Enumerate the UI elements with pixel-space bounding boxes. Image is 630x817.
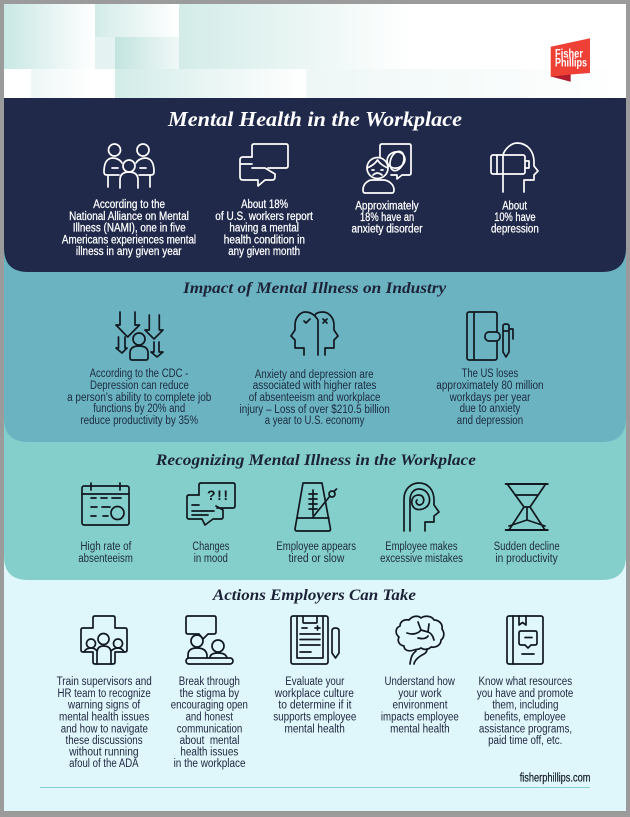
icon: family group — [104, 144, 154, 188]
text blocks: statistics: of U.S. workers report — [215, 211, 314, 223]
text blocks: actions: Understand how — [384, 676, 455, 688]
icon: speech bubbles with punctuation: ?!! — [207, 487, 228, 503]
text blocks: statistics: illness in any given year — [76, 246, 182, 258]
icon: notebook and pen — [467, 312, 513, 360]
text blocks: actions: afoul of the ADA — [69, 758, 139, 770]
text blocks: actions: mental health — [284, 724, 345, 736]
text blocks: recognizing: Employee makes — [385, 541, 458, 553]
header banner with teal blocks — [4, 4, 626, 98]
icon: calendar — [82, 483, 129, 525]
icon: anxious woman with scribble thought — [363, 144, 411, 193]
icon: two opposing heads — [291, 312, 338, 355]
text blocks: impact: The US loses — [462, 368, 518, 380]
text blocks: actions: without running — [68, 746, 139, 758]
text blocks: statistics: About — [502, 200, 528, 212]
text blocks: statistics: health condition in — [224, 234, 305, 246]
text blocks: actions: assistance programs, — [479, 724, 572, 736]
text blocks: impact: a year to U.S. economy — [265, 415, 365, 427]
text blocks: actions: environment — [392, 700, 448, 712]
text blocks: impact: functions by 20% and — [93, 403, 185, 415]
text blocks: impact: approximately 80 million — [436, 380, 544, 392]
text blocks: recognizing — [78, 541, 560, 565]
text blocks: actions: Break through — [179, 676, 240, 688]
text blocks: impact: a person's ability to complete job — [67, 392, 211, 404]
text blocks: recognizing: tired or slow — [288, 553, 345, 565]
text blocks: actions: encouraging open — [171, 700, 248, 712]
text blocks: actions: impacts employee — [381, 712, 459, 724]
text blocks: actions: Train supervisors and — [57, 676, 152, 688]
icon: speech bubbles with punctuation — [187, 483, 235, 525]
text blocks: impact: of absenteeism and workplace — [249, 392, 380, 404]
text blocks: statistics: any given month — [228, 246, 300, 258]
text blocks: recognizing: Sudden decline — [494, 541, 560, 553]
text blocks: actions: about mental — [180, 735, 240, 747]
text blocks: actions: benefits, employee — [484, 712, 566, 724]
text blocks: recognizing: Employee appears — [276, 541, 356, 553]
heading: impact: Impact of Mental Illness on Industry — [182, 280, 447, 297]
icon: team in medical cross — [81, 616, 127, 664]
text blocks: statistics: 10% have — [494, 212, 536, 224]
text blocks: statistics: 18% have an — [360, 212, 414, 224]
logo: Fisher Phillips flag: Phillips — [555, 58, 587, 70]
text blocks: actions: and how to navigate — [61, 724, 148, 736]
text blocks: impact: and depression — [457, 415, 523, 427]
text blocks: actions: Know what resources — [478, 676, 572, 688]
text blocks: actions: supports employee — [273, 712, 356, 724]
text blocks: actions — [57, 676, 573, 770]
text blocks: recognizing: in mood — [194, 553, 228, 565]
text blocks: actions: you have and promote — [477, 688, 573, 700]
text blocks: statistics: According to the — [93, 199, 165, 211]
text blocks: impact: associated with higher rates — [253, 380, 377, 392]
icon: metronome — [295, 483, 336, 531]
panel: mental health in the workplace — [4, 98, 626, 272]
icon: hourglass — [506, 484, 548, 530]
text blocks: actions: your work — [398, 688, 442, 700]
text blocks: statistics: depression — [491, 224, 539, 236]
text blocks: statistics: Americans experiences mental — [62, 234, 196, 246]
text blocks: recognizing: High rate of — [80, 541, 132, 553]
icon: clipboard and pen — [291, 616, 339, 664]
text blocks: impact: According to the CDC - — [90, 368, 189, 380]
text blocks: statistics: anxiety disorder — [352, 224, 423, 236]
icon: brain — [396, 616, 444, 664]
icon: two people talking — [186, 616, 233, 664]
website address: fisherphillips.com — [520, 772, 590, 784]
text blocks: statistics — [62, 199, 539, 258]
text blocks: statistics: having a mental — [229, 222, 299, 234]
text blocks: actions: to determine if it — [278, 700, 352, 712]
text blocks: actions: mental health issues — [59, 712, 150, 724]
text blocks: actions: them, including — [492, 700, 558, 712]
text blocks: statistics: Illness (NAMI), one in five — [73, 222, 186, 234]
icon: chat bubbles — [240, 144, 288, 186]
text blocks: actions: mental health — [390, 724, 450, 736]
text blocks: actions: warning signs of — [67, 700, 141, 712]
text blocks: statistics: National Alliance on Mental — [69, 211, 189, 223]
text blocks: impact: workdays per year — [449, 392, 531, 404]
text blocks: actions: health issues — [180, 746, 239, 758]
text blocks: impact: due to anxiety — [460, 403, 521, 415]
text blocks: recognizing: absenteeism — [78, 553, 133, 565]
icon: head with spiral — [404, 483, 439, 531]
logo: Fisher Phillips flag: Fisher — [555, 49, 583, 61]
text blocks: actions: in the workplace — [174, 758, 246, 770]
icon: person under falling arrows — [116, 312, 163, 360]
heading: actions: Actions Employers Can Take — [212, 587, 416, 604]
panel: actions employers can take — [4, 550, 626, 811]
text blocks: statistics: Approximately — [355, 200, 419, 212]
text blocks: recognizing: in productivity — [495, 553, 558, 565]
heading: recognizing: Recognizing Mental Illness in the Workplace — [155, 452, 476, 469]
text blocks: actions: the stigma by — [180, 688, 239, 700]
text blocks: impact — [67, 368, 544, 427]
text blocks: statistics: About 18% — [241, 199, 288, 211]
text blocks: impact: Anxiety and depression are — [255, 369, 374, 381]
text blocks: recognizing: excessive mistakes — [380, 553, 463, 565]
text blocks: actions: Evaluate your — [285, 676, 345, 688]
title: Mental Health in the Workplace — [167, 107, 462, 131]
text blocks: actions: paid time off, etc. — [488, 735, 562, 747]
text blocks: impact: reduce productivity by 35% — [80, 415, 198, 427]
panel: recognizing mental illness — [4, 410, 626, 580]
text blocks: impact: injury – Loss of over $210.5 billion — [240, 404, 390, 416]
text blocks: actions: and honest — [186, 712, 234, 724]
logo: Fisher Phillips flag — [551, 38, 590, 82]
text blocks: actions: HR team to recognize — [58, 688, 151, 700]
text blocks: actions: communication — [177, 724, 242, 736]
icon: head with low battery — [491, 143, 538, 192]
text blocks: actions: these discussions — [66, 735, 143, 747]
text blocks: actions: workplace culture — [274, 688, 354, 700]
icon: handbook with message — [507, 616, 543, 664]
text blocks: impact: Depression can reduce — [90, 380, 189, 392]
text blocks: recognizing: Changes — [192, 541, 230, 553]
panel: impact on industry — [4, 240, 626, 442]
